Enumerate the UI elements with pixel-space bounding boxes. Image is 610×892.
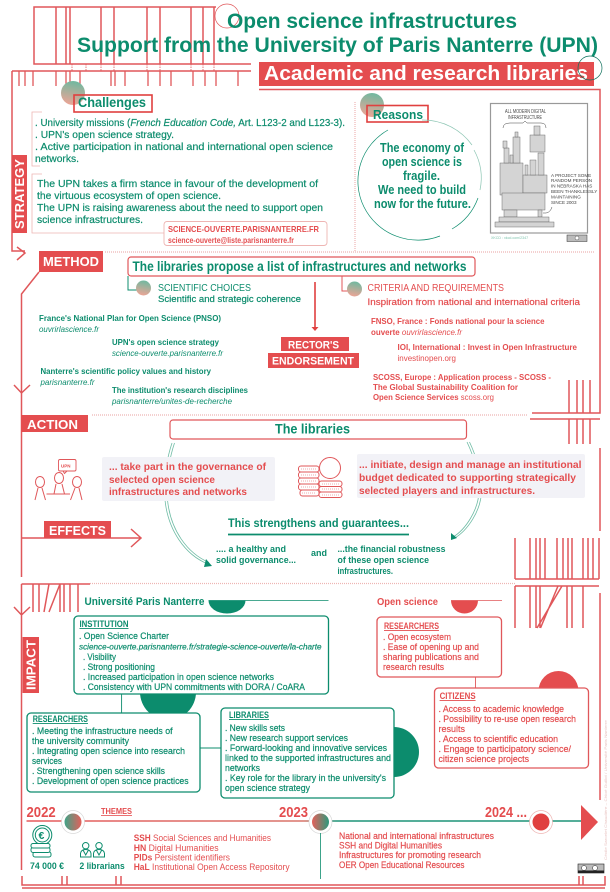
panel: governance action: ... take part in the governance of (109, 461, 266, 473)
list: networks (225, 763, 260, 773)
heading: RESEARCHERS (33, 714, 88, 724)
panel: libraries impact (221, 708, 394, 798)
panel: institution (74, 616, 328, 694)
subheading: Scientific and strategic coherence (158, 294, 301, 305)
list of sources (39, 313, 248, 406)
text block: UPN stance (32, 174, 323, 233)
text block: missions: . UPN's open science strategy. (35, 129, 174, 141)
callout: fragile economy (374, 141, 471, 211)
list: institution impact: . Open Science Charter (79, 631, 169, 641)
list of sources: France's National Plan for Open Science (PNSO) (39, 313, 221, 323)
list: institution impact: . Strong positioning (83, 662, 155, 672)
icon: euro coin and stack (31, 826, 52, 857)
timeline (26, 805, 598, 840)
text block: missions: networks. (35, 153, 79, 165)
text block: missions: . Active participation in national and international open science (35, 141, 333, 153)
heading: the libraries: The libraries (275, 422, 350, 436)
link box: science-ouverte@liste.parisnanterre.fr (168, 236, 294, 245)
callout: fragile economy: We need to build (378, 183, 466, 197)
panel: researchers university (27, 713, 200, 792)
heading: RESEARCHERS (384, 621, 439, 631)
list: results (438, 724, 465, 734)
action label (21, 415, 88, 432)
arrow: right curve to financial robustness (451, 442, 482, 540)
themes label: THEMES (101, 807, 133, 816)
panel: citizens (434, 688, 588, 768)
milestone 2023: 2023 (279, 805, 308, 821)
banner: academic and research libraries: Academic and research libraries (264, 62, 588, 85)
list of criteria: The Global Sustainability Coalition for (373, 382, 519, 392)
heading: open science (377, 596, 502, 614)
list: linked to the supported infrastructures and (225, 753, 391, 763)
method label (39, 251, 103, 272)
icon: gradient circle (136, 280, 151, 296)
text block: missions (32, 112, 345, 166)
list of sources: Nanterre's scientific policy values and history (40, 366, 211, 376)
list: . Strengthening open science skills (32, 766, 165, 776)
arrow: to rector endorsement (312, 282, 318, 331)
heading: institution: INSTITUTION (80, 619, 128, 629)
list: 2023 themes: OER Open Educational Resources (339, 860, 465, 870)
action label: ACTION (27, 417, 78, 432)
milestone 2022 (26, 805, 84, 834)
list: . Ease of opening up and (383, 642, 479, 652)
icon: gradient circle (61, 81, 85, 105)
rector's endorsement label: ENDORSEMENT (272, 356, 354, 368)
subheading: Inspiration from national and international criteria (368, 297, 581, 308)
list: citizen science projects (438, 754, 529, 764)
method label: METHOD (43, 254, 99, 269)
text: financial robustness: ...the financial robustness (338, 544, 446, 554)
panel: criteria and requirements (342, 276, 581, 402)
comic credit: XKCD : xkcd.com/2347 (491, 236, 528, 240)
text: healthy governance: solid governance... (216, 555, 296, 565)
list of sources: ouvrirlascience.fr (39, 324, 100, 334)
text: financial robustness: of these open science (338, 555, 429, 565)
text block: UPN stance: The UPN takes a firm stance in favour of the development of (37, 178, 318, 190)
heading: libraries propose: The libraries propose a list of infrastructures and networks (132, 259, 466, 274)
list of criteria: SCOSS, Europe : Application process - SCOSS - (373, 372, 551, 382)
strategy label: STRATEGY (13, 158, 27, 229)
heading: université paris nanterre (84, 596, 328, 614)
list: institution impact (79, 631, 322, 692)
callout: fragile economy: fragile. (403, 169, 440, 183)
list: themes glossary: PIDs Persistent identifiers (134, 852, 230, 862)
2023 connector (320, 833, 322, 879)
arrow: left curve to governance (165, 443, 212, 567)
text block: UPN stance: The UPN is raising awareness about the need to support open (37, 202, 323, 214)
list: institution impact: . Increased participation in open science networks (83, 672, 274, 682)
text block: UPN stance: science infrastructures. (37, 214, 143, 226)
panel: scientific choices (39, 276, 301, 406)
heading: université paris nanterre: Université Paris Nanterre (84, 596, 204, 608)
list (32, 726, 189, 786)
milestone 2023 (279, 805, 332, 834)
title: Support from the University of Paris Nanterre (UPN) (77, 34, 598, 57)
list: 2023 themes: Infrastructures for promoting research (339, 850, 481, 860)
list: research results (383, 662, 444, 672)
list: 2023 themes: SSH and Digital Humanities (339, 840, 442, 850)
dotted section separators (90, 102, 594, 584)
list (438, 704, 576, 764)
text: financial robustness: infrastructures. (338, 566, 393, 576)
panel: challenges (32, 81, 345, 246)
list of criteria (371, 316, 577, 402)
list: themes glossary: HN Digital Humanities (134, 843, 219, 853)
list: 2023 themes: National and international infrastructures (339, 831, 494, 841)
list: open science strategy (225, 783, 310, 793)
panel: governance action (102, 457, 275, 501)
link box (164, 222, 327, 246)
title (77, 10, 598, 57)
decorative top barcode frame (12, 4, 251, 86)
rector's endorsement label: RECTOR'S (288, 340, 339, 352)
credit: vertical authors: Cécile Sarcelet Chaudière – Chloé Guillot / Université Paris Nanterre (603, 719, 608, 860)
heading: open science: Open science (377, 596, 438, 608)
circle outline (358, 120, 481, 240)
comic: xkcd digital infrastructure (490, 104, 597, 233)
icon: cc licence badge (578, 864, 604, 873)
list: . Possibility to re-use open research (438, 714, 576, 724)
list: institution impact: . Consistency with UPN commitments with DORA / CoARA (83, 682, 305, 692)
heading: SCIENTIFIC CHOICES (158, 283, 251, 294)
list: . New skills sets (225, 723, 285, 733)
panel: researchers open science (377, 617, 502, 677)
icon: euro coin and stack: € (38, 830, 44, 842)
list of sources: The institution's research disciplines (112, 385, 248, 395)
list: . Meeting the infrastructure needs of (32, 726, 173, 736)
icon: people meeting (35, 460, 82, 500)
icon: gradient circle (347, 282, 362, 296)
icon: coins (298, 458, 342, 498)
list (383, 632, 479, 672)
panel: budget action (357, 454, 585, 498)
budget figure: 74 000 € (30, 861, 64, 871)
panel: governance action: infrastructures and networks (109, 486, 247, 498)
comic: xkcd digital infrastructure: MAINTAINING (551, 194, 581, 200)
comic: xkcd digital infrastructure: BEEN THANKLESSLY (551, 189, 597, 194)
heading: LIBRARIES (229, 710, 269, 720)
callout: fragile economy: now for the future. (374, 197, 471, 211)
comic: xkcd digital infrastructure: RANDOM PERSON (551, 178, 592, 183)
icon: gradient circle (360, 93, 384, 117)
decorative bottom bracket (22, 876, 605, 888)
list of sources: parisnanterre/unites-de-recherche (111, 396, 232, 406)
panel: budget action: selected players and infrastructures. (359, 485, 535, 497)
milestone 2024: 2024 ... (485, 805, 527, 821)
list: . Access to scientific education (438, 734, 558, 744)
list: themes glossary: HaL Institutional Open Access Repository (134, 862, 290, 872)
list of criteria: investinopen.org (398, 353, 456, 363)
panel: budget action: ... initiate, design and manage an institutional (359, 459, 582, 471)
rector's endorsement label (268, 337, 359, 368)
list: . Forward-looking and innovative services (225, 743, 387, 753)
list of sources: parisnanterre.fr (40, 377, 96, 387)
text block: missions: . University missions (French Education Code, Art. L123-2 and L123-3). (35, 117, 345, 129)
comic: xkcd digital infrastructure: ALL MODERN DIGITAL (505, 109, 546, 115)
list of sources: science-ouverte.parisnanterre.fr (112, 348, 224, 358)
text: financial robustness (338, 544, 446, 576)
arrow head (581, 805, 598, 840)
list: institution impact: science-ouverte.parisnanterre.fr/strategie-science-ouverte/la-charte (79, 642, 322, 652)
text: and: and (311, 548, 327, 558)
panel: effects (216, 518, 446, 576)
callout: fragile economy: The economy of (380, 141, 465, 155)
effects label: EFFECTS (49, 523, 106, 538)
icon: two librarians (80, 842, 104, 857)
heading: the libraries (170, 420, 466, 439)
callout: fragile economy: open science is (382, 155, 462, 169)
link box: SCIENCE-OUVERTE.PARISNANTERRE.FR (168, 224, 319, 234)
comic: xkcd digital infrastructure: A PROJECT SOME (551, 173, 591, 178)
list of criteria: FNSO, France : Fonds national pour la science (371, 316, 545, 326)
decorative circles and connectors behind boxes (122, 664, 578, 777)
text block: UPN stance: the virtuous ecosystem of open science. (37, 190, 221, 202)
comic: xkcd digital infrastructure: SINCE 2003 (551, 200, 577, 205)
text: healthy governance: .... a healthy and (216, 544, 286, 554)
icon: cc licence badge (567, 235, 587, 242)
panel: budget action: budget dedicated to supporting strategically (359, 472, 576, 484)
list: themes glossary (134, 833, 290, 872)
list (225, 723, 391, 793)
heading: challenges: Challenges (78, 95, 146, 110)
staffing figure: 2 librarians (80, 861, 125, 871)
connector (128, 276, 138, 290)
heading: reasons: Reasons (373, 108, 423, 122)
title: Open science infrastructures (227, 10, 517, 33)
heading: strengthens: This strengthens and guarantees... (228, 518, 409, 530)
panel: reasons (358, 93, 597, 242)
milestone 2024 (485, 805, 552, 834)
list: . Open ecosystem (383, 632, 451, 642)
list of sources: UPN's open science strategy (112, 337, 219, 347)
list: institution impact: . Visibility (83, 652, 116, 662)
list: sharing publications and (383, 652, 479, 662)
panel: governance action: selected open science (109, 474, 215, 486)
list of criteria: IOI, International : Invest in Open Infrastructure (398, 342, 577, 352)
heading: CITIZENS (440, 691, 476, 701)
comic: xkcd digital infrastructure: IN NEBRASKA HAS (551, 184, 592, 188)
comic: xkcd digital infrastructure: INFRASTRUCTURE (508, 115, 542, 121)
list: . Key role for the library in the university's (225, 773, 386, 783)
text: healthy governance (216, 544, 296, 565)
timeline axis (26, 820, 582, 822)
list of criteria: Open Science Services scoss.org (373, 392, 494, 402)
list: the university community (32, 736, 129, 746)
list: . Access to academic knowledge (438, 704, 564, 714)
list of criteria: ouverte ouvrirlascience.fr (371, 327, 463, 337)
list: . Engage to participatory science/ (438, 744, 571, 754)
list: . Integrating open science into research (32, 746, 185, 756)
icon: people meeting: UPN (61, 464, 71, 468)
list: 2023 themes (339, 831, 494, 870)
milestone 2022: 2022 (26, 805, 56, 821)
connector (342, 276, 350, 291)
list: . New research support services (225, 733, 348, 743)
impact label: IMPACT (24, 640, 38, 690)
list: themes glossary: SSH Social Sciences and Humanities (134, 833, 271, 843)
list: . Development of open science practices (32, 776, 189, 786)
list: services (32, 756, 62, 766)
heading: CRITERIA AND REQUIREMENTS (368, 283, 504, 294)
